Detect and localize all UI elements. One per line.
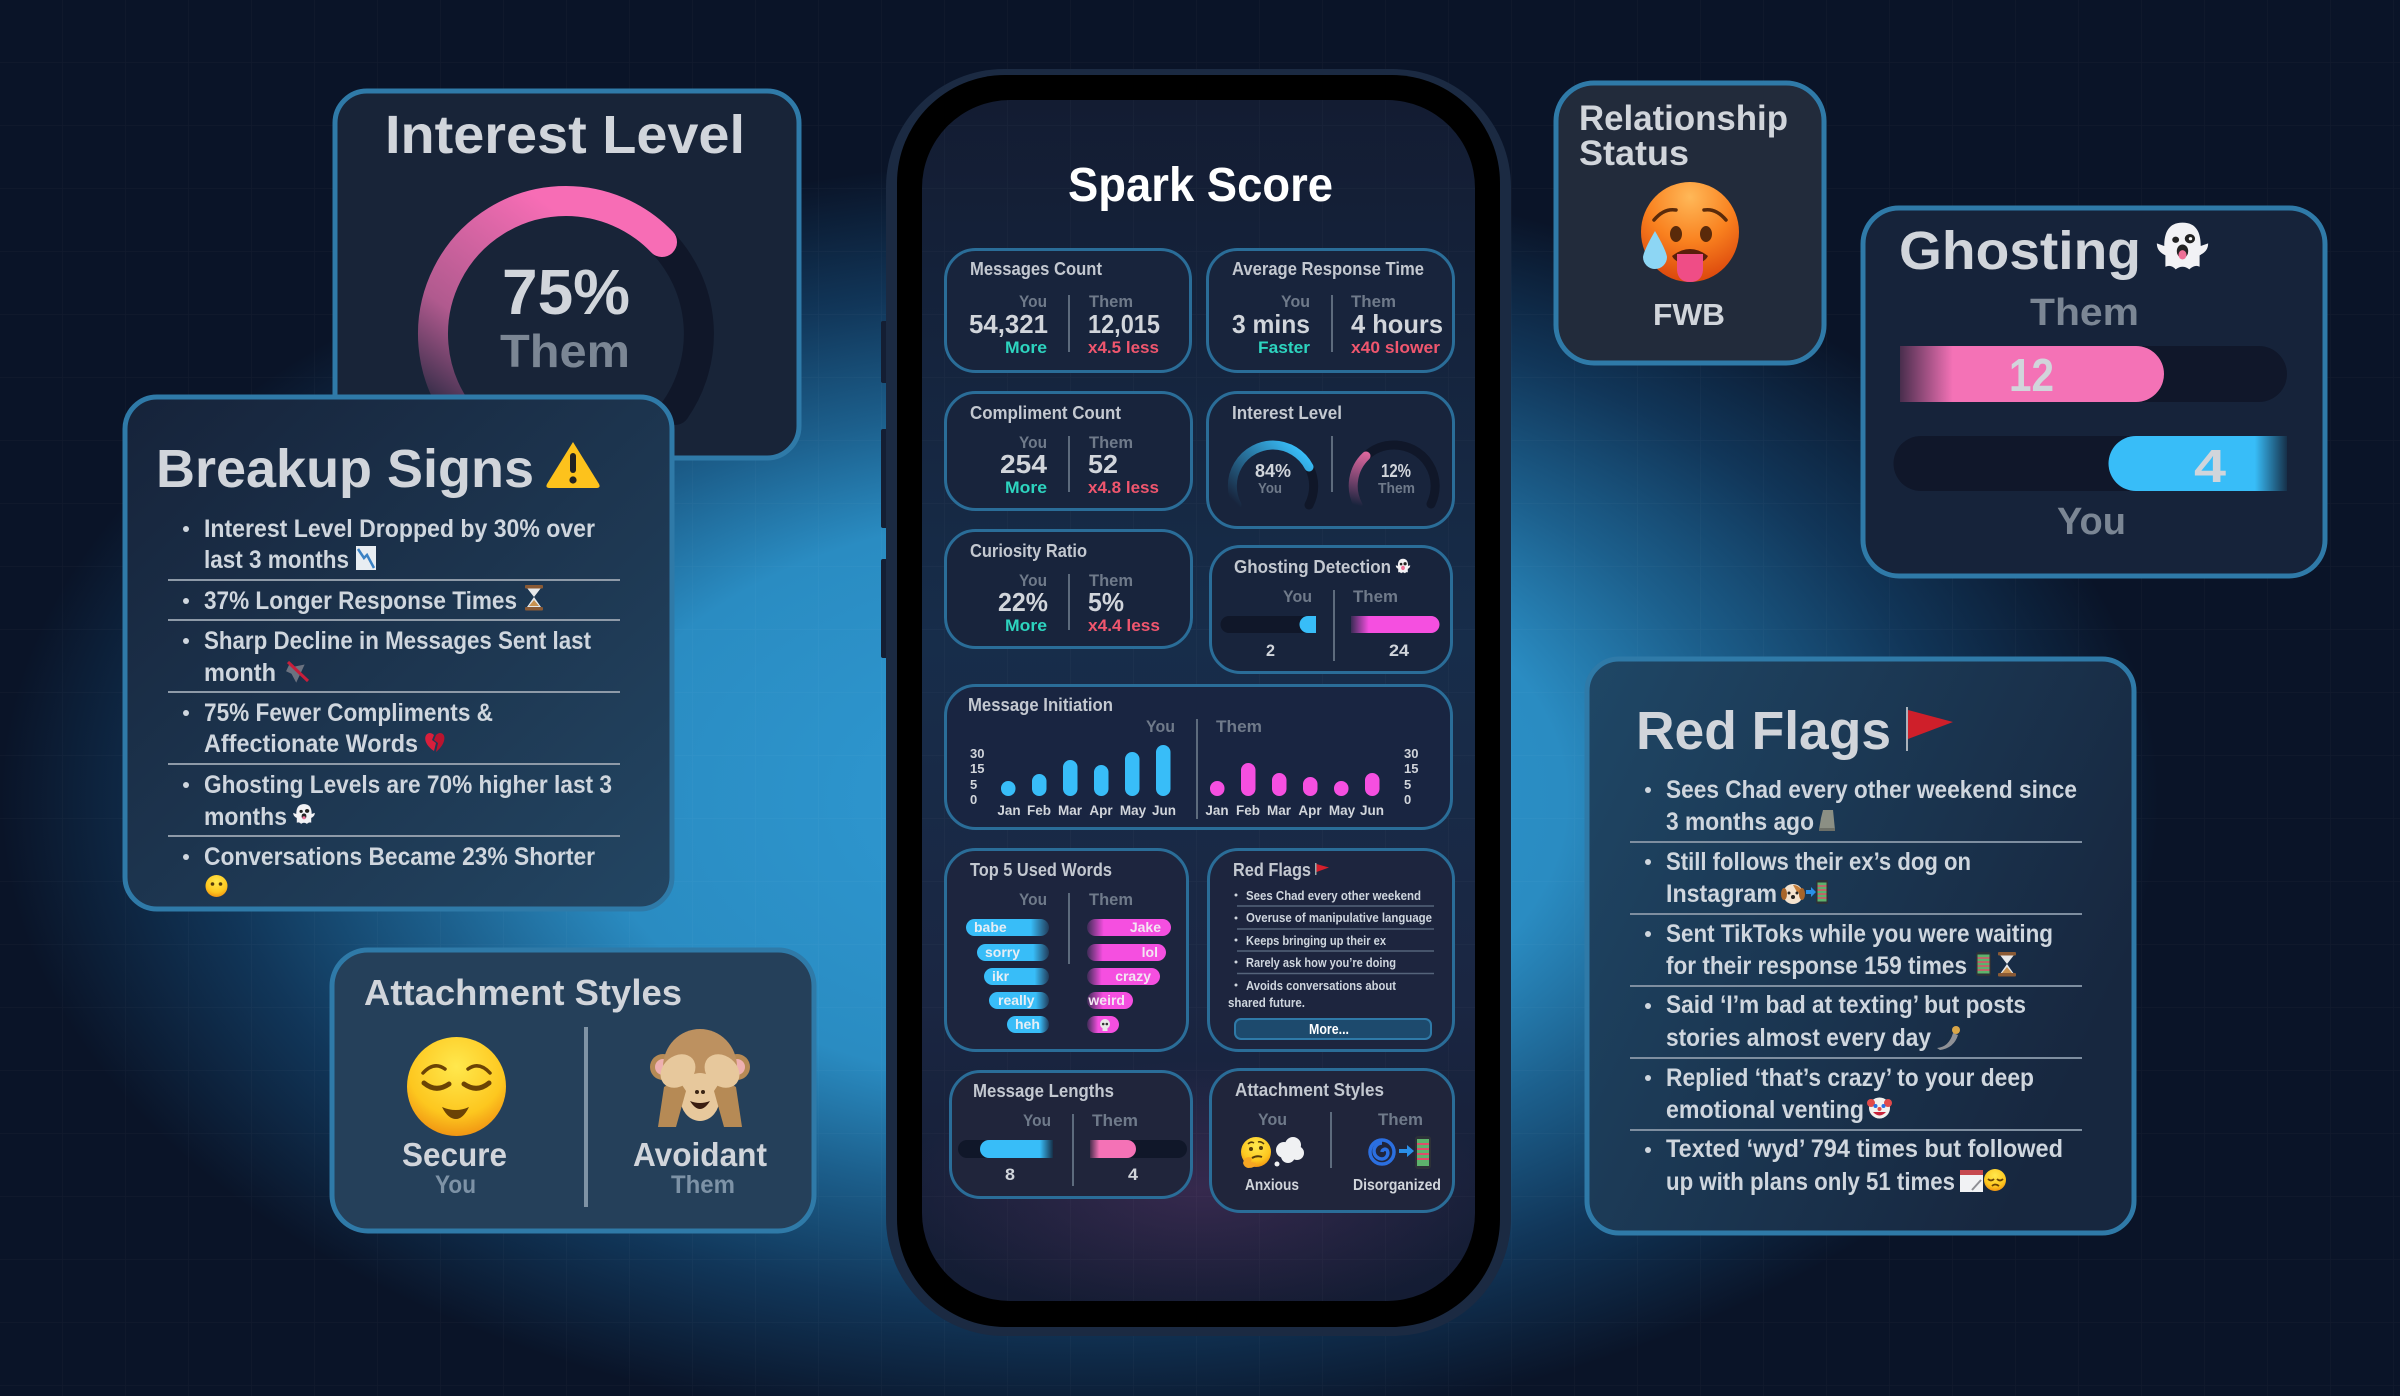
phone frame xyxy=(886,69,1511,1336)
icon: pensive face xyxy=(1984,1169,2006,1191)
card: compliment count: You xyxy=(1019,433,1047,452)
card: interest level small xyxy=(1208,392,1454,528)
card: message lengths: You xyxy=(1023,1111,1051,1130)
icon: hourglass xyxy=(525,585,543,610)
y axis left: 0 xyxy=(970,792,977,807)
bar: them 12: 12 xyxy=(2009,349,2054,401)
list: red flags: 3 months ago xyxy=(1666,808,1814,836)
list: breakup signs xyxy=(168,515,620,871)
list: breakup signs: 75% Fewer Compliments & xyxy=(204,699,493,727)
card: messages count: Messages Count xyxy=(970,259,1102,279)
bars: lengths xyxy=(958,1140,1187,1158)
heading: breakup signs: Breakup Signs xyxy=(156,439,534,499)
icon: no mouth face xyxy=(206,875,228,897)
month labels: you: Apr xyxy=(1089,803,1113,818)
icon: hourglass xyxy=(1998,952,2016,976)
panel: breakup signs xyxy=(125,397,672,909)
word bars: you: ikr xyxy=(992,968,1010,984)
card: message lengths: 8 xyxy=(1005,1165,1015,1184)
list: breakup signs: Interest Level Dropped by 30% over xyxy=(204,515,595,543)
card: top 5 used words xyxy=(946,850,1188,1050)
bar: you 4 xyxy=(1894,436,2287,492)
icon: warning xyxy=(546,442,600,488)
card: ghosting detection: Them xyxy=(1353,587,1398,606)
y axis left: 15 xyxy=(970,761,984,776)
gauge: 75 percent xyxy=(433,201,699,413)
word bars: you xyxy=(966,919,1049,1033)
heading: ghosting: Ghosting xyxy=(1899,221,2141,281)
card: compliment count: Compliment Count xyxy=(970,403,1121,423)
card: curiosity ratio: Them xyxy=(1089,571,1133,590)
list: breakup signs: Sharp Decline in Messages Sent last xyxy=(204,627,592,655)
y axis left xyxy=(970,746,984,807)
month labels: them: Jun xyxy=(1360,803,1384,818)
card: average response time: Average Response Time xyxy=(1232,259,1424,279)
word bars: them: lol xyxy=(1142,944,1158,960)
list: red flags: up with plans only 51 times xyxy=(1666,1168,1955,1196)
month labels: them: May xyxy=(1329,803,1356,818)
card: interest level small: 84% xyxy=(1255,461,1291,481)
card: messages count: You xyxy=(1019,292,1047,311)
title: spark score: Spark Score xyxy=(1068,159,1333,212)
list: red flags: Still follows their ex’s dog on xyxy=(1666,848,1971,876)
list: red flags: stories almost every day xyxy=(1666,1024,1931,1052)
card: average response time: You xyxy=(1281,292,1310,311)
card: compliment count: 254 xyxy=(1000,449,1048,479)
card: average response time: 4 hours xyxy=(1351,309,1443,339)
icon: phone xyxy=(1976,952,1991,976)
card: average response time: x40 slower xyxy=(1351,338,1440,357)
list: red flags xyxy=(1630,776,2082,1196)
icon: thinking face xyxy=(1241,1137,1271,1168)
card: ghosting detection: 24 xyxy=(1389,641,1410,660)
month labels: you: May xyxy=(1120,803,1147,818)
word bars: them: crazy xyxy=(1115,968,1151,984)
label: secure: Secure xyxy=(402,1136,507,1173)
card: messages count: More xyxy=(1005,338,1047,357)
y axis right xyxy=(1404,746,1418,807)
card: attachment styles small: Disorganized xyxy=(1353,1177,1441,1194)
heading: relationship status: Relationship xyxy=(1579,99,1788,138)
card: messages count: Them xyxy=(1089,292,1133,311)
month labels: them: Jan xyxy=(1205,803,1229,818)
heading: red flags: Red Flags xyxy=(1636,701,1891,761)
card: top 5 used words: Them xyxy=(1089,890,1133,909)
month labels: you: Feb xyxy=(1027,803,1051,818)
card: compliment count: More xyxy=(1005,478,1047,497)
card: interest level small: You xyxy=(1258,480,1282,497)
card: message initiation: You xyxy=(1146,717,1175,736)
heading: relationship status xyxy=(1579,99,1788,173)
list: breakup signs: Ghosting Levels are 70% higher last 3 xyxy=(204,771,612,799)
list: red flags small: shared future. xyxy=(1228,996,1305,1010)
list: red flags small xyxy=(1228,889,1434,1010)
icon: ghost small xyxy=(1396,559,1410,573)
card: ghosting detection: Ghosting Detection xyxy=(1234,557,1391,577)
y axis right: 30 xyxy=(1404,746,1418,761)
bar: them 12 xyxy=(1900,346,2287,402)
month labels: them: Feb xyxy=(1236,803,1260,818)
icon: red flag xyxy=(1906,707,1953,751)
list: red flags small: Avoids conversations about xyxy=(1246,979,1397,993)
panel: relationship status xyxy=(1556,83,1824,363)
y axis right: 15 xyxy=(1404,761,1418,776)
label: you: You xyxy=(2057,501,2126,543)
list: red flags: Sees Chad every other weekend since xyxy=(1666,776,2077,804)
card: curiosity ratio: 22% xyxy=(998,587,1048,617)
bar: you 4: 4 xyxy=(2194,440,2227,492)
y axis left: 30 xyxy=(970,746,984,761)
list: breakup signs: Affectionate Words xyxy=(204,730,418,758)
divider xyxy=(584,1027,588,1207)
card: curiosity ratio: More xyxy=(1005,616,1047,635)
card: curiosity ratio: Curiosity Ratio xyxy=(970,541,1087,561)
card: attachment styles small xyxy=(1210,1070,1454,1212)
card: average response time xyxy=(1208,250,1454,372)
icon: clown xyxy=(1867,1098,1892,1118)
icon: thought cloud xyxy=(1274,1137,1304,1166)
card: curiosity ratio xyxy=(946,530,1192,648)
month labels: you: Jan xyxy=(997,803,1021,818)
card: messages count xyxy=(946,250,1190,372)
word bars: you: sorry xyxy=(985,944,1020,960)
icon: skull xyxy=(1100,1019,1110,1031)
card: top 5 used words: You xyxy=(1019,890,1047,909)
icon: chart down xyxy=(356,546,376,570)
card: average response time: Them xyxy=(1351,292,1396,311)
y axis right: 5 xyxy=(1404,777,1411,792)
word bars: you: really xyxy=(998,992,1035,1008)
card: message lengths: Message Lengths xyxy=(973,1081,1114,1101)
list: breakup signs: last 3 months xyxy=(204,546,349,574)
label: you: You xyxy=(435,1171,476,1199)
word bars: you: heh xyxy=(1015,1016,1040,1032)
label: them: Them xyxy=(671,1171,735,1199)
list: red flags: Replied ‘that’s crazy’ to your deep xyxy=(1666,1064,2034,1092)
card: message lengths xyxy=(950,1072,1192,1198)
list: breakup signs: months xyxy=(204,803,287,831)
phone side buttons xyxy=(881,321,889,658)
icon: monkey covering eyes xyxy=(650,1029,750,1127)
icon: calendar xyxy=(1960,1170,1983,1192)
icon: arrow phone xyxy=(1806,880,1828,904)
card: ghosting detection xyxy=(1210,546,1452,672)
label: avoidant: Avoidant xyxy=(633,1136,767,1173)
icon: relieved face xyxy=(407,1037,506,1136)
card: messages count: 12,015 xyxy=(1088,309,1160,339)
card: message initiation: Them xyxy=(1216,717,1262,736)
month labels: them: Mar xyxy=(1267,803,1292,818)
y axis right: 0 xyxy=(1404,792,1411,807)
card: average response time: Faster xyxy=(1258,338,1310,357)
icon: ghost xyxy=(293,804,315,824)
card: red flags small xyxy=(1208,850,1454,1050)
month labels: them: Apr xyxy=(1298,803,1322,818)
gauge caption: Them xyxy=(500,325,630,377)
phone xyxy=(881,69,1511,1336)
icon: ghost large xyxy=(2157,223,2208,269)
bar chart: you xyxy=(1001,745,1170,796)
month labels: them xyxy=(1205,803,1384,818)
icon: spiral xyxy=(1370,1140,1394,1164)
list: red flags small: Overuse of manipulative language xyxy=(1246,911,1432,925)
month labels: you: Mar xyxy=(1058,803,1083,818)
card: red flags small: Red Flags xyxy=(1233,860,1311,880)
icon: broken heart xyxy=(425,733,444,752)
phone screen xyxy=(922,100,1475,1301)
card: top 5 used words: Top 5 Used Words xyxy=(970,860,1112,880)
card: average response time: 3 mins xyxy=(1232,309,1310,339)
list: breakup signs: month xyxy=(204,659,276,687)
month labels: you xyxy=(997,803,1176,818)
bar chart: them xyxy=(1210,763,1380,796)
list: red flags small: Sees Chad every other weekend xyxy=(1246,889,1421,903)
word bars: you: babe xyxy=(974,919,1007,935)
label: them: Them xyxy=(2030,292,2139,334)
card: curiosity ratio: You xyxy=(1019,571,1047,590)
icon: selfie arm xyxy=(1937,1026,1960,1050)
month labels: you: Jun xyxy=(1152,803,1176,818)
icon: moai xyxy=(1819,810,1835,831)
list: red flags: Sent TikToks while you were waiting xyxy=(1666,920,2053,948)
list: breakup signs: 37% Longer Response Times xyxy=(204,587,517,615)
phone bezel xyxy=(897,75,1500,1327)
icon: muted speaker xyxy=(284,659,308,683)
card: compliment count: x4.8 less xyxy=(1088,478,1159,497)
card: curiosity ratio: 5% xyxy=(1088,587,1124,617)
button: more xyxy=(1235,1019,1431,1039)
panel: ghosting xyxy=(1863,208,2325,576)
card: message initiation xyxy=(946,686,1452,828)
button: more: More... xyxy=(1309,1022,1349,1038)
icon: arrow to phone xyxy=(1399,1136,1431,1169)
panel: attachment styles xyxy=(332,950,814,1231)
card: interest level small: Them xyxy=(1378,480,1415,497)
card: attachment styles small: Attachment Styles xyxy=(1235,1080,1384,1100)
card: message lengths: Them xyxy=(1092,1111,1138,1130)
gauge value: 75% xyxy=(502,256,630,328)
card: ghosting detection: 2 xyxy=(1266,641,1275,660)
label: FWB: FWB xyxy=(1653,297,1725,332)
list: red flags: for their response 159 times xyxy=(1666,952,1967,980)
list: breakup signs: Conversations Became 23% Shorter xyxy=(204,843,595,871)
list: red flags: Instagram xyxy=(1666,880,1777,908)
card: attachment styles small: You xyxy=(1258,1110,1287,1129)
gauge: them 12 percent xyxy=(1353,445,1435,505)
word bars: them: Jake xyxy=(1130,919,1161,935)
card: interest level small: 12% xyxy=(1381,461,1411,481)
word bars: them: weird xyxy=(1087,992,1125,1008)
icon: dog xyxy=(1781,884,1805,904)
card: message initiation: Message Initiation xyxy=(968,695,1113,715)
panel: interest level xyxy=(335,91,799,458)
y axis left: 5 xyxy=(970,777,977,792)
gauge: you 84 percent xyxy=(1232,445,1314,505)
list: red flags: Texted ‘wyd’ 794 times but followed xyxy=(1666,1135,2063,1163)
list: red flags: Said ‘I’m bad at texting’ but posts xyxy=(1666,991,2026,1019)
card: curiosity ratio: x4.4 less xyxy=(1088,616,1160,635)
card: ghosting detection: You xyxy=(1283,587,1312,606)
card: compliment count xyxy=(946,392,1192,510)
icon: hot face xyxy=(1641,182,1739,282)
heading: relationship status: Status xyxy=(1579,134,1689,173)
heading: attachment styles: Attachment Styles xyxy=(364,972,682,1013)
card: messages count: x4.5 less xyxy=(1088,338,1159,357)
list: red flags small: Rarely ask how you’re doing xyxy=(1246,956,1396,970)
panel: red flags xyxy=(1587,659,2134,1233)
card: messages count: 54,321 xyxy=(969,309,1048,339)
word bars: them xyxy=(1087,919,1171,1033)
list: red flags small: Keeps bringing up their ex xyxy=(1246,934,1386,948)
icon: flag small xyxy=(1315,863,1329,875)
list: red flags: emotional venting xyxy=(1666,1096,1864,1124)
card: compliment count: 52 xyxy=(1088,449,1118,479)
card: attachment styles small: Anxious xyxy=(1245,1177,1299,1194)
card: message lengths: 4 xyxy=(1128,1165,1139,1184)
card: compliment count: Them xyxy=(1089,433,1133,452)
heading: interest level: Interest Level xyxy=(385,105,745,165)
card: attachment styles small: Them xyxy=(1378,1110,1423,1129)
card: interest level small: Interest Level xyxy=(1232,403,1342,423)
